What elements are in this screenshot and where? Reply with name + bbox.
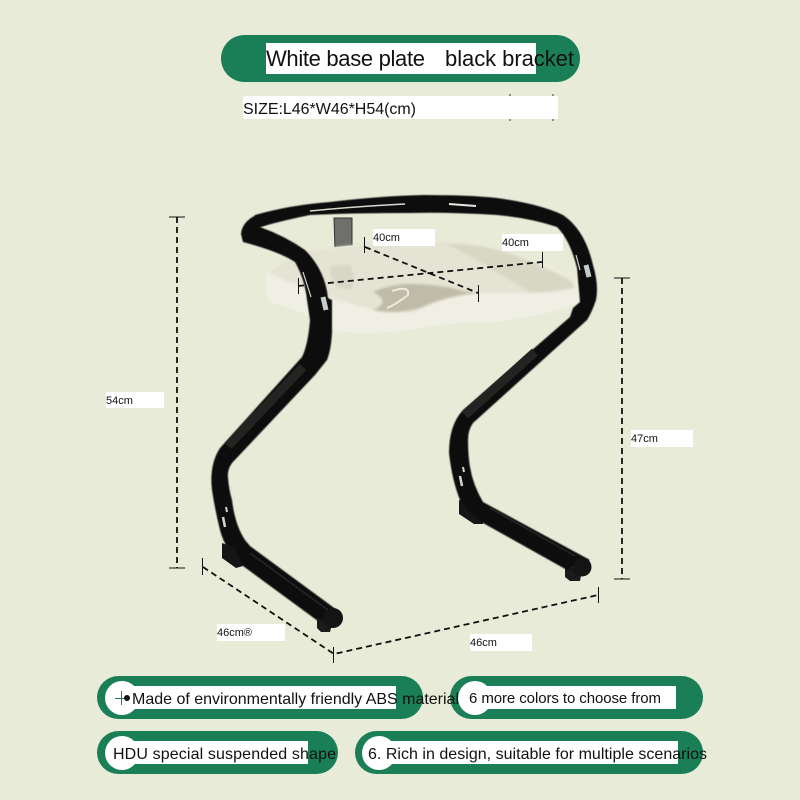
front foot end cap: [323, 608, 343, 628]
feature pill: suspended shape: HDU special suspended shape: [113, 746, 336, 763]
feature pill: rich design: [355, 731, 707, 774]
title pill: White base plate: [266, 46, 425, 71]
rear foot end cap: [572, 558, 592, 576]
feature pill: ABS material: Made of environmentally friendly ABS material: [132, 691, 459, 708]
rear small foot: [565, 566, 582, 581]
dimension: base depth and width: [202, 558, 598, 663]
tube highlights: [223, 204, 589, 610]
white base plate: [266, 241, 582, 333]
title pill: black bracket: [445, 46, 574, 71]
feature pill: colours: 6 more colors to choose from: [469, 690, 661, 707]
front small foot: [317, 618, 332, 632]
label: 46cm width: 46cm: [470, 637, 497, 649]
label: 47cm: 47cm: [631, 433, 658, 445]
feature pill: suspended shape: [97, 731, 338, 774]
title pill: [221, 35, 580, 82]
dimension: plate width and depth: [298, 237, 542, 302]
label: 40cm width: 40cm: [502, 237, 529, 249]
label: 46cm width: [470, 634, 532, 651]
label: 46cm depth: [217, 624, 285, 641]
rear foot block: [459, 500, 483, 524]
label: 54cm: [106, 392, 164, 408]
label: 40cm depth: 40cm: [373, 232, 400, 244]
feature pill: rich design: 6. Rich in design, suitable for multiple scenarios: [368, 746, 707, 763]
front foot block: [222, 543, 243, 568]
rear clip: [334, 218, 352, 249]
feature pill: ABS material: [97, 676, 459, 719]
label: 46cm depth: 46cm®: [217, 627, 252, 639]
feature pill: colours: [450, 676, 703, 719]
size text: [243, 94, 558, 121]
size text: SIZE:L46*W46*H54(cm): [243, 101, 416, 118]
front leg tube: [211, 215, 337, 624]
label: 47cm: [631, 430, 693, 447]
plate swirl: [373, 284, 478, 312]
ring and rear leg tube: [255, 195, 597, 570]
label: 40cm width: [502, 234, 563, 251]
product: shelf with black bracket: [211, 195, 597, 632]
dimension: rear height: [614, 278, 630, 579]
label: 54cm: 54cm: [106, 395, 133, 407]
label: 40cm depth: [373, 229, 435, 246]
dimension: total height: [169, 217, 185, 568]
plate recess: [330, 265, 354, 290]
